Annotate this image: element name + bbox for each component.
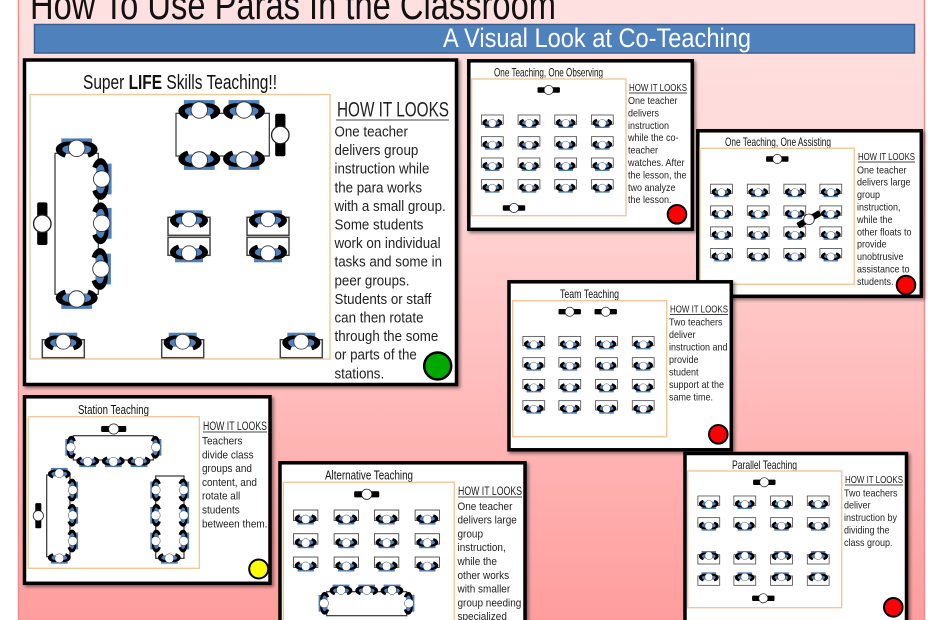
description: deliver: [844, 500, 870, 512]
classroom diagram: [700, 148, 854, 284]
green status dot: [424, 352, 451, 380]
description: teacher: [628, 145, 658, 157]
description: students: [202, 504, 240, 517]
description: [856, 165, 911, 288]
red status dot: [709, 425, 728, 444]
description: or parts of the: [334, 347, 417, 364]
panel heading: Station Teaching: [78, 403, 149, 417]
panel heading: Alternative Teaching: [325, 468, 413, 482]
description: while the: [457, 556, 497, 568]
description: through the some: [334, 328, 438, 345]
description: between them.: [202, 518, 267, 530]
description: group needing: [458, 597, 521, 610]
how it looks heading: HOW IT LOOKS: [629, 82, 687, 94]
description: other floats to: [857, 227, 911, 238]
description: Students or staff: [334, 291, 431, 308]
description: [457, 500, 521, 620]
description: One teacher: [628, 96, 677, 107]
description: with smaller: [457, 583, 511, 596]
description: [334, 124, 446, 383]
panel heading: Team Teaching: [560, 287, 619, 301]
classroom diagram: [30, 94, 330, 359]
description: [844, 488, 898, 549]
description: One teacher: [334, 124, 408, 141]
how it looks heading: HOW IT LOOKS: [845, 474, 903, 486]
description: One teacher: [458, 500, 513, 513]
classroom diagram: [283, 482, 454, 620]
panel heading: One Teaching, One Assisting: [725, 135, 831, 149]
description: delivers large: [857, 177, 910, 189]
description: [627, 96, 686, 206]
description: the para works: [334, 180, 422, 197]
description: while the: [856, 214, 892, 226]
description: watches. After: [627, 158, 684, 169]
subtitle banner: [34, 23, 914, 53]
description: deliver: [669, 329, 695, 341]
subtitle banner: A Visual Look at Co-Teaching: [443, 23, 751, 53]
description: students.: [857, 276, 893, 288]
description: unobtrusive: [857, 252, 903, 263]
classroom diagram: [472, 79, 626, 216]
description: while the co-: [627, 133, 678, 144]
red status dot: [884, 598, 903, 617]
description: [202, 435, 267, 530]
panel: Super LIFE Skills Teaching: [24, 60, 456, 384]
panel heading: Super LIFE Skills Teaching!!: [83, 72, 277, 94]
panel: Station Teaching: [24, 397, 270, 583]
description: One teacher: [857, 165, 906, 176]
description: Two teachers: [844, 488, 898, 499]
description: peer groups.: [334, 273, 409, 290]
description: dividing the: [844, 525, 889, 537]
panel: One Teaching, One Assisting: [698, 131, 921, 296]
description: instruction while: [334, 161, 430, 178]
description: assistance to: [857, 264, 909, 276]
panel heading: Parallel Teaching: [732, 458, 797, 472]
description: other works: [458, 569, 509, 582]
description: rotate all: [202, 490, 240, 503]
description: groups and: [202, 463, 252, 475]
description: instruction: [628, 120, 669, 132]
yellow status dot: [249, 560, 268, 578]
description: divide class: [202, 449, 254, 461]
description: same time.: [669, 392, 713, 403]
description: Some students: [334, 217, 423, 234]
red status dot: [668, 205, 686, 224]
description: support at the: [669, 379, 724, 391]
classroom diagram: [513, 301, 667, 437]
description: provide: [669, 354, 698, 366]
description: Two teachers: [669, 317, 723, 328]
description: the lesson, the: [628, 170, 686, 182]
panel: Parallel Teaching: [685, 454, 906, 620]
description: stations.: [334, 366, 384, 383]
how it looks heading: HOW IT LOOKS: [458, 486, 522, 498]
description: group: [458, 528, 483, 541]
description: tasks and some in: [334, 254, 442, 271]
description: content, and: [202, 476, 257, 489]
description: delivers group: [334, 142, 418, 159]
description: Teachers: [202, 435, 242, 448]
description: student: [669, 367, 699, 378]
description: class group.: [844, 537, 892, 549]
panel: Alternative Teaching: [280, 463, 525, 620]
classroom diagram: [28, 417, 199, 568]
how it looks heading: HOW IT LOOKS: [670, 304, 728, 316]
description: with a small group.: [334, 198, 446, 215]
panel: One Teaching, One Observing: [469, 61, 692, 229]
description: group: [857, 190, 880, 201]
panel: Team Teaching: [509, 282, 731, 450]
how it looks heading: HOW IT LOOKS: [203, 421, 267, 433]
description: delivers: [628, 108, 659, 120]
description: instruction,: [857, 202, 900, 214]
description: delivers large: [458, 514, 517, 527]
description: two analyze: [628, 182, 675, 194]
red status dot: [897, 276, 915, 294]
description: instruction and: [669, 342, 727, 353]
description: instruction by: [844, 513, 897, 524]
description: instruction,: [458, 542, 506, 554]
panel heading: One Teaching, One Observing: [494, 66, 603, 80]
description: work on individual: [334, 235, 441, 252]
description: provide: [857, 239, 886, 251]
description: [669, 317, 727, 403]
description: can then rotate: [334, 310, 424, 327]
classroom diagram: [688, 471, 842, 608]
description: the lesson.: [628, 195, 671, 206]
how it looks heading: HOW IT LOOKS: [337, 99, 449, 122]
